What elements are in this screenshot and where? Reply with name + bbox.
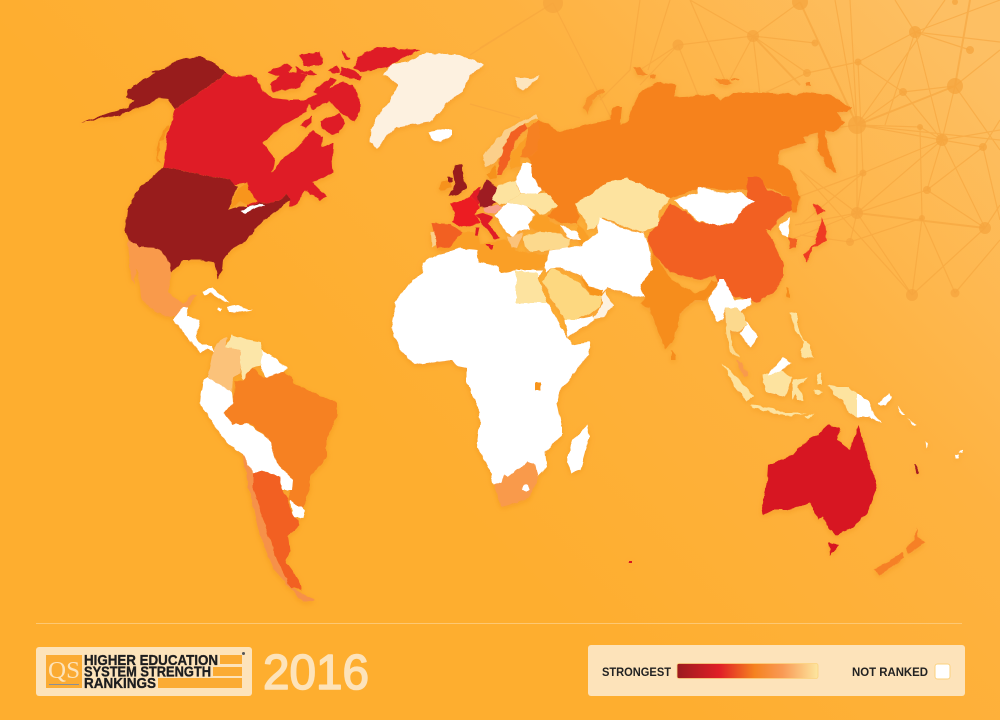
Java and Timor (752, 373, 823, 420)
Svalbard (515, 75, 540, 90)
Germany (477, 180, 498, 208)
Uruguay (290, 500, 305, 518)
Denmark (486, 165, 497, 180)
Sweden (497, 123, 528, 175)
Papua New Guinea (857, 393, 882, 423)
Asia (543, 177, 963, 474)
Argentina (253, 470, 302, 590)
Philippines (790, 312, 813, 358)
year: 2016 (263, 646, 369, 700)
Japan (803, 203, 827, 262)
Caucasus (560, 225, 582, 240)
logo heading: RANKINGS (84, 675, 156, 692)
Benelux (470, 186, 481, 205)
legend label strongest: STRONGEST (602, 665, 672, 679)
New Caledonia (913, 464, 920, 474)
Poland and Czechia (492, 180, 520, 205)
Sumatra (722, 363, 753, 402)
Europe (431, 67, 852, 252)
QS badge: QS (48, 658, 80, 684)
network nodes (543, 0, 991, 301)
Guyanas (260, 350, 287, 378)
Oman and UAE (593, 292, 613, 320)
Turkey (523, 232, 570, 252)
Russia (528, 82, 852, 223)
Lesotho (523, 485, 529, 491)
Kerguelen dot (629, 561, 632, 563)
Central America (173, 307, 213, 353)
QS logo (36, 647, 252, 696)
South America (200, 335, 337, 602)
Alaska (81, 57, 227, 123)
Lakes Erie and Ontario (240, 203, 265, 214)
colour scale (677, 664, 818, 678)
India (640, 250, 718, 350)
China (647, 177, 792, 302)
Yemen (565, 316, 595, 337)
South Africa (493, 462, 538, 507)
Pacific islands (897, 405, 963, 458)
logo heading (84, 652, 218, 692)
Sulawesi (792, 378, 808, 400)
seas: Mediterranean, Black Sea, Caspian, Gulf, Red Sea (436, 137, 603, 338)
Saudi Arabia (543, 268, 602, 320)
Madagascar (567, 425, 589, 473)
New Zealand (874, 527, 925, 575)
logo heading: SYSTEM STRENGTH (84, 664, 211, 680)
Finland (520, 120, 540, 158)
Greenland (370, 53, 485, 150)
Spain (432, 223, 462, 248)
Iceland (429, 129, 452, 142)
Oceania (629, 425, 925, 575)
world map (81, 47, 963, 602)
Caribbean (202, 288, 253, 312)
Ireland (438, 180, 452, 190)
Africa (392, 248, 590, 507)
Australia (762, 425, 877, 535)
Norway (483, 115, 538, 167)
Greece (507, 233, 523, 248)
Vancouver coast islands (156, 125, 170, 163)
North America (81, 47, 420, 353)
Colombia (208, 337, 240, 392)
registered mark (242, 652, 245, 655)
Ukraine (507, 193, 557, 215)
UK (449, 163, 467, 197)
New Britain (878, 393, 892, 406)
Venezuela (226, 335, 263, 380)
Middle East and Central Asia (545, 217, 653, 297)
QS badge (46, 655, 82, 688)
Tasmania (829, 543, 839, 555)
legend (588, 645, 965, 696)
Northern Ireland (447, 177, 453, 182)
Indochina (708, 280, 758, 348)
Lake Victoria (535, 382, 542, 390)
logo heading: HIGHER EDUCATION (84, 652, 218, 669)
Portugal (431, 231, 436, 248)
Ecuador Peru Bolivia Paraguay (200, 377, 293, 490)
stripes (158, 655, 242, 688)
Balkans (495, 202, 535, 237)
North Korea (778, 217, 790, 237)
divider (36, 623, 962, 624)
Sri Lanka (671, 350, 676, 360)
Thailand (725, 308, 747, 358)
Mongolia (675, 187, 755, 225)
Arctic islands (633, 67, 811, 86)
not ranked swatch (935, 664, 950, 679)
Italy (475, 213, 500, 250)
Chile (242, 453, 315, 602)
Mexico (128, 240, 197, 317)
Taiwan (786, 287, 789, 298)
Gulf (580, 273, 603, 297)
Baltics and Belarus (515, 163, 542, 194)
USA (125, 167, 290, 280)
Peninsular Malaysia (736, 360, 748, 377)
legend label not ranked: NOT RANKED (852, 665, 928, 679)
France (450, 195, 480, 227)
South Korea (788, 237, 797, 248)
Brazil (224, 367, 337, 508)
Canada (163, 47, 420, 207)
Malaysian Borneo (768, 357, 791, 375)
Kazakhstan (575, 178, 670, 232)
Novaya Zemlya (583, 88, 604, 115)
New Guinea west (828, 385, 857, 417)
Austria (483, 205, 502, 213)
network pattern (470, 0, 1000, 295)
Egypt (516, 271, 547, 303)
Great Lakes (230, 184, 258, 207)
Borneo (762, 370, 792, 397)
